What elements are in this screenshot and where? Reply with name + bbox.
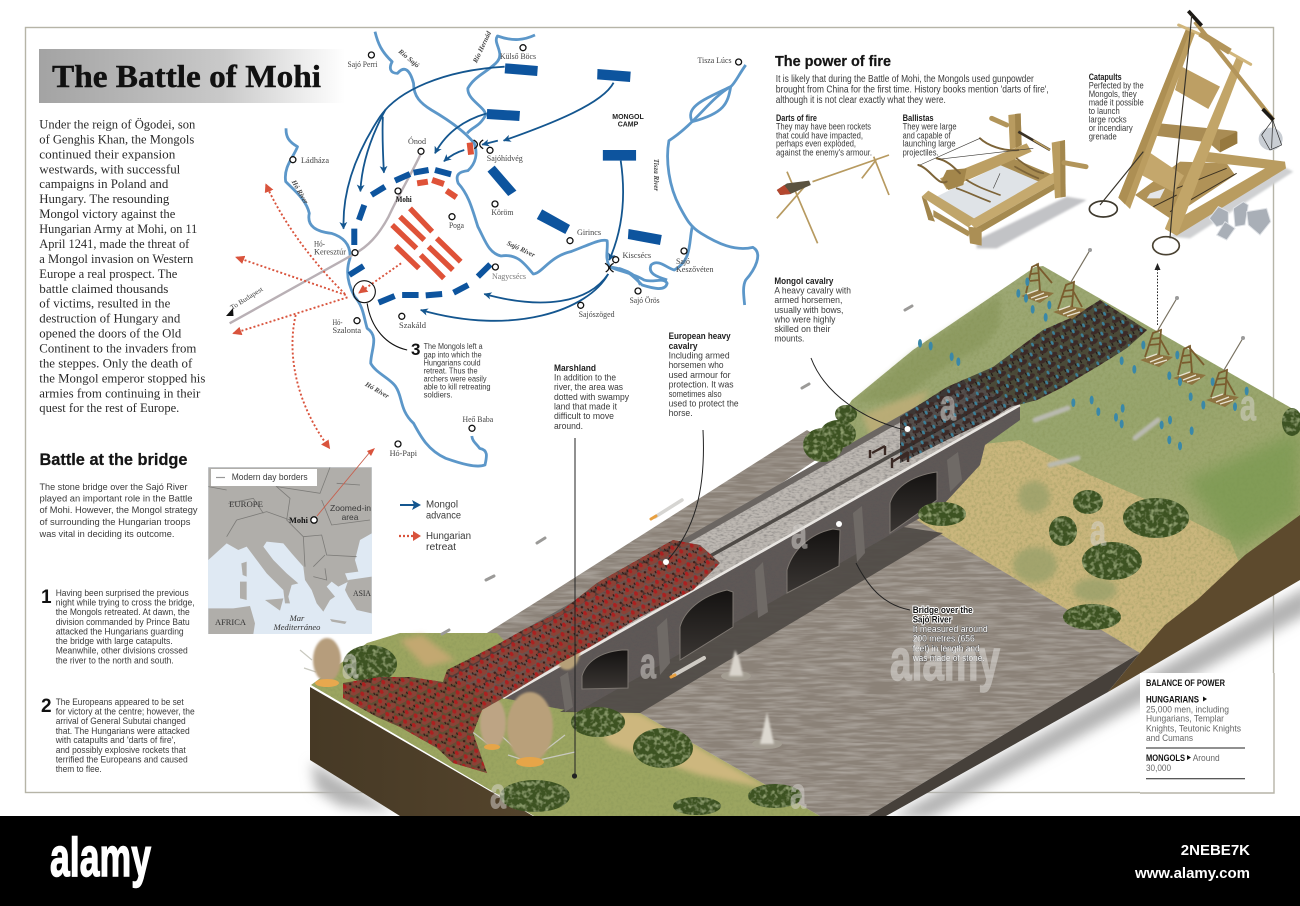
icon: rocks: [1209, 202, 1271, 240]
european cavalry: [343, 540, 720, 773]
darts of fire caption: perhaps even exploded,: [776, 139, 856, 149]
step 3: soldiers.: [424, 391, 453, 400]
inset legend: Modern day borders: [232, 472, 308, 482]
european heavy cavalry text: cavalry: [669, 341, 698, 352]
right earth wedge: [1108, 515, 1300, 692]
intro text block: Mongol victory against the: [39, 207, 176, 221]
mongol advance arrows: [343, 67, 623, 321]
stock watermarks: a: [1090, 506, 1106, 555]
power of fire text: [776, 74, 1049, 106]
inset labels: EUROPE: [229, 499, 263, 509]
image id: 2NEBE7K: [1181, 842, 1250, 859]
intro text block: a Mongol invasion on Western: [39, 252, 194, 266]
darts of fire caption: that could have impacted,: [776, 130, 863, 140]
left near bank sand: [575, 704, 770, 789]
intro text block: continued their expansion: [39, 147, 176, 161]
river labels: Hó River: [363, 380, 391, 400]
bridge shadow on water: [560, 525, 943, 713]
legend: mongol advance: [400, 500, 461, 522]
gap circle and leader: [353, 140, 614, 350]
step 2: that. The Hungarians were attacked: [56, 726, 190, 737]
hungarians entry: [1146, 694, 1245, 748]
place labels: Heő Baba: [462, 415, 494, 424]
intro text block: [39, 118, 205, 415]
legend: hungarian retreat: retreat: [426, 542, 456, 553]
site url: www.alamy.com: [1134, 865, 1250, 882]
ground shadow: [311, 585, 1300, 818]
step 2: The Europeans appeared to be set: [56, 697, 184, 708]
mongol cavalry text: [774, 276, 851, 344]
intro text block: of victims, resulted in the: [39, 297, 171, 311]
stock watermarks: a: [791, 509, 807, 558]
ballistas caption: They were large: [903, 122, 957, 132]
river: [575, 510, 1140, 816]
stock watermarks: [342, 381, 1256, 818]
heading: battle at the bridge: Battle at the bridge: [40, 450, 188, 469]
darts of fire caption: They may have been rockets: [776, 122, 871, 132]
marshland text: around.: [554, 421, 583, 432]
marshland text: difficult to move: [554, 411, 614, 422]
step 2: terrified the Europeans and caused: [56, 754, 188, 765]
balance heading: BALANCE OF POWER: [1146, 678, 1225, 688]
place labels: Ónod: [408, 136, 426, 146]
legend: arrows: [399, 500, 471, 553]
power of fire text: although it is not clear exactly what they were.: [776, 95, 946, 106]
inset labels: Mar: [289, 613, 305, 623]
inset locator map: [208, 448, 375, 634]
bridge over the sajo text: [912, 605, 988, 664]
power of fire heading: The power of fire: [775, 53, 891, 70]
intro text block: April 1241, made the threat of: [39, 237, 190, 251]
step 3: gap into which the: [424, 350, 482, 359]
bridge battlefield illustration: [300, 248, 1300, 818]
step 1: Meanwhile, other divisions crossed: [56, 646, 188, 657]
bridge intro text: of surrounding the Hungarian troops: [40, 517, 191, 528]
water splashes: [721, 650, 782, 749]
intro text block: campaigns in Poland and: [39, 177, 169, 191]
step 3: Hungarians could: [424, 358, 481, 367]
settlements: [290, 45, 742, 447]
intro text block: quest for the rest of Europe.: [39, 401, 179, 415]
catapults caption: [1089, 72, 1144, 142]
catapult pointer arrow: [1154, 263, 1160, 325]
step 2: with catapults and 'darts of fire',: [55, 735, 176, 746]
step 1: [41, 587, 195, 666]
right bank green patches: [1185, 430, 1300, 550]
mongol camp label: MONGOL: [612, 114, 644, 121]
place labels: Keresztúr: [314, 248, 346, 256]
inset labels: Mohi: [289, 515, 309, 525]
bridge over the sajo text: It measured around: [913, 624, 988, 635]
marshland text: river, the area was: [554, 382, 623, 393]
marshland text: dotted with swampy: [554, 392, 629, 403]
step 3: 3: [411, 340, 420, 359]
step 2: them to flee.: [56, 764, 102, 775]
mongol troop bars: [349, 63, 662, 303]
right bank darker ridge: [855, 295, 1000, 402]
bridge deck: [447, 382, 1020, 698]
ballistas caption: launching large: [903, 139, 956, 149]
river front cut band: [868, 653, 1140, 816]
step 3: The Mongols left a: [424, 342, 483, 351]
intro text block: Continent to the invaders from: [39, 342, 196, 356]
stock watermarks: a: [790, 769, 806, 818]
legend: mongol advance: advance: [426, 510, 461, 522]
mongol cavalry text: Mongol cavalry: [774, 276, 834, 287]
intro text block: Hungary. The resounding: [39, 192, 170, 206]
intro text block: Hungarian Army at Mohi, on 11: [39, 222, 197, 236]
mongol cavalry text: usually with bows,: [774, 305, 843, 316]
place labels: Tisza Lúcs: [698, 56, 732, 65]
marshland text: land that made it: [554, 402, 617, 412]
map rivers and road: [230, 32, 758, 466]
stock watermarks: a: [342, 639, 358, 688]
inset labels: ASIA: [353, 588, 372, 598]
mongol cavalry text: A heavy cavalry with: [774, 286, 851, 296]
step 1: division commanded by Prince Batu: [56, 617, 190, 628]
mongol camp label: CAMP: [618, 122, 639, 128]
intro text block: the steppes. Only the death of: [39, 356, 193, 370]
step 1: the Mongols retreated. At dawn, the: [56, 607, 190, 618]
hungarian troop bars: [392, 143, 471, 278]
step 2: arrival of General Subutai changed: [56, 716, 186, 727]
inset labels: Zoomed-in: [330, 503, 371, 513]
place labels: Mohi: [396, 195, 412, 204]
to budapest marker: To Budapest: [229, 285, 264, 312]
legend: mongol advance: Mongol: [426, 500, 458, 510]
hungarians entry: HUNGARIANS: [1146, 694, 1199, 704]
mongol cavalry text: armed horsemen,: [774, 295, 842, 306]
right bank sand: [890, 440, 1240, 653]
explosions: [300, 630, 580, 767]
power of fire text: It is likely that during the Battle of Mohi, the Mongols used gunpowder: [776, 74, 1034, 85]
marshland text: In addition to the: [554, 372, 616, 384]
intro text block: armies from continuing in their: [39, 386, 201, 400]
stock watermarks: a: [490, 769, 506, 818]
step 1: 1: [41, 587, 52, 608]
power of fire text: brought from China for the first time. History books mention 'darts of fire',: [776, 84, 1049, 96]
step 2: 2: [41, 696, 52, 717]
rockets in flight: [442, 306, 1158, 677]
place labels: Poga: [449, 221, 464, 230]
catapults caption: Perfected by the: [1089, 81, 1144, 91]
inset labels: Mediterráneo: [273, 622, 320, 632]
place labels: Szakáld: [399, 321, 426, 330]
step 2: and possibly explosive rockets that: [56, 745, 186, 756]
inset labels: AFRICA: [215, 617, 247, 627]
bridge over the sajo text: Sajó River: [913, 614, 952, 625]
arches: [582, 472, 937, 689]
bridge over the sajo text: 200 metres (656: [913, 634, 975, 645]
step 3: archers were easily: [424, 374, 487, 383]
hungarian retreat arrows: [234, 185, 401, 448]
river labels: Hó River: [289, 178, 310, 206]
european heavy cavalry text: protection. It was: [669, 380, 734, 390]
marshland text: Marshland: [554, 363, 596, 374]
mongol cavalry: [870, 300, 1147, 468]
intro text block: westwards, with successful: [39, 162, 181, 176]
battle map: [226, 30, 758, 466]
step 2: [41, 696, 195, 775]
river labels: Río Hernád: [471, 30, 493, 65]
place labels: Keszővéten: [676, 265, 714, 274]
far river strip: [487, 430, 835, 650]
bridge intro text: of Mohi. However, the Mongol strategy: [40, 505, 198, 516]
place labels: Ládháza: [301, 156, 329, 165]
hill catapults: [1021, 248, 1245, 407]
ballistas caption: [903, 113, 957, 157]
right bank sand patch top: [862, 390, 930, 435]
intro text block: Under the reign of Ögodei, son: [39, 118, 196, 132]
hill sand patch: [400, 635, 455, 667]
legend: hungarian retreat: [399, 531, 471, 553]
place labels: [301, 52, 732, 458]
bridge intro text: The stone bridge over the Sajó River: [40, 482, 188, 493]
title: The Battle of Mohi: [52, 58, 321, 94]
darts of fire caption: [776, 113, 872, 157]
catapults caption: Catapults: [1089, 72, 1122, 82]
alamy logo: alamy: [50, 826, 151, 888]
place labels: Hó-Papi: [390, 449, 418, 458]
place labels: Nagycsécs: [492, 272, 526, 281]
step 1: Having been surprised the previous: [56, 588, 189, 599]
catapults caption: made it possible: [1089, 97, 1144, 107]
intro text block: opened the doors of the Old: [39, 326, 182, 340]
icon: ballista: [918, 113, 1087, 248]
step 3: able to kill retreating: [424, 382, 491, 391]
stock watermarks: a: [940, 381, 956, 430]
icon: dart of fire: [777, 155, 889, 243]
place labels: Sajószöged: [579, 310, 615, 319]
european heavy cavalry text: Including armed: [669, 350, 730, 362]
stock watermarks: a: [1240, 381, 1256, 430]
catapults caption: Mongols, they: [1089, 89, 1137, 99]
european heavy cavalry text: horsemen who: [669, 360, 724, 371]
step 1: attacked the Hungarians guarding: [56, 626, 184, 638]
european heavy cavalry text: used armour for: [669, 370, 731, 381]
place labels: Sajó Perri: [348, 60, 378, 69]
darts of fire caption: Darts of fire: [776, 113, 817, 123]
mongol cavalry text: mounts.: [774, 334, 804, 344]
european heavy cavalry text: sometimes also: [669, 389, 722, 400]
hungarians entry: and Cumans: [1146, 732, 1193, 743]
hungarians entry: Hungarians, Templar: [1146, 713, 1224, 724]
ballistas caption: Ballistas: [903, 113, 934, 123]
step 1: the bridge with large catapults.: [56, 636, 173, 647]
river labels: Tisza River: [652, 159, 660, 191]
catapults caption: to launch: [1089, 106, 1120, 116]
intro text block: battle claimed thousands: [39, 282, 168, 296]
river labels: Sajó River: [505, 239, 536, 259]
icon: catapult: [1089, 11, 1293, 255]
step 3: retreat. Thus the: [424, 366, 478, 375]
darts of fire caption: against the enemy's armour.: [776, 147, 872, 157]
mohi marker and zoom arrow: [311, 448, 375, 523]
river labels: [289, 30, 660, 400]
bushes: [343, 405, 1300, 815]
bridge intro text: was vital in deciding its outcome.: [39, 529, 175, 540]
hungarians entry: Knights, Teutonic Knights: [1146, 722, 1241, 733]
mongol foot soldiers: [918, 277, 1249, 450]
left near bank grass: [311, 633, 820, 816]
step 3: [411, 340, 491, 400]
inset legend: [211, 469, 317, 486]
catapults caption: grenade: [1089, 132, 1117, 142]
intro text block: the Mongol emperor stopped his: [39, 371, 205, 385]
place labels: Köröm: [491, 208, 514, 217]
european heavy cavalry text: [669, 331, 739, 419]
place labels: Hó-: [332, 318, 343, 327]
catapults caption: large rocks: [1089, 115, 1127, 125]
place labels: Sajó Örös: [630, 296, 660, 305]
place labels: Külső Böcs: [500, 52, 536, 61]
place labels: Hó-: [314, 240, 325, 248]
balance of power box: [1140, 673, 1274, 793]
intro text block: destruction of Hungary and: [39, 312, 181, 326]
mongols entry: 30,000: [1146, 762, 1171, 773]
right bank grass: [820, 266, 1300, 653]
european heavy cavalry text: European heavy: [669, 331, 731, 342]
bridge over the sajo text: Bridge over the: [913, 605, 973, 616]
european heavy cavalry text: used to protect the: [669, 398, 739, 410]
place labels: Sajó: [676, 257, 690, 266]
step 2: for victory at the centre; however, the: [56, 706, 195, 718]
mongols entry: MONGOLS: [1146, 753, 1185, 763]
stock watermarks: a: [640, 639, 656, 688]
bridge intro text: [39, 482, 198, 540]
ballistas caption: and capable of: [903, 130, 951, 140]
catapults caption: or incendiary: [1089, 123, 1133, 133]
mongols entry: Around: [1193, 752, 1220, 763]
stock watermarks: alamy: [890, 628, 1000, 693]
bridge over the sajo text: feet) in length and: [913, 643, 980, 654]
intro text block: of Genghis Khan, the Mongols: [39, 132, 194, 146]
bridge side with arches: [503, 405, 1020, 712]
ballistas caption: projectiles.: [903, 147, 939, 157]
mongols entry: [1146, 752, 1245, 779]
road: [230, 154, 421, 323]
intro text block: Europe a real prospect. The: [39, 267, 178, 281]
legend: hungarian retreat: Hungarian: [426, 531, 471, 542]
place labels: Szalonta: [332, 326, 361, 335]
bridge intro text: played an important role in the Battle: [40, 494, 192, 504]
bottom black band: [0, 816, 1300, 906]
mongol camp label: [612, 114, 644, 128]
step 1: night while trying to cross the bridge,: [56, 598, 195, 609]
leader dots: [572, 426, 910, 779]
mongol cavalry text: who were highly: [774, 314, 836, 326]
right bank olive patches: [1013, 481, 1117, 602]
hungarians entry: 25,000 men, including: [1146, 703, 1229, 714]
piers: [560, 452, 962, 712]
leader lines: [575, 358, 910, 776]
mongol cavalry text: skilled on their: [774, 324, 831, 335]
marshland text: [554, 363, 629, 432]
title: [39, 49, 345, 103]
place labels: Girincs: [577, 228, 601, 237]
left earth face: [310, 687, 533, 816]
step 1: the river to the north and south.: [56, 655, 174, 666]
inset labels: [215, 499, 372, 632]
inset labels: area: [342, 512, 359, 522]
bridge over the sajo text: was made of stone.: [912, 653, 985, 664]
place labels: Kiscsécs: [622, 251, 651, 260]
river labels: Río Sajó: [396, 47, 421, 70]
place labels: Sajóhídvég: [487, 154, 523, 163]
european heavy cavalry text: horse.: [669, 408, 693, 419]
